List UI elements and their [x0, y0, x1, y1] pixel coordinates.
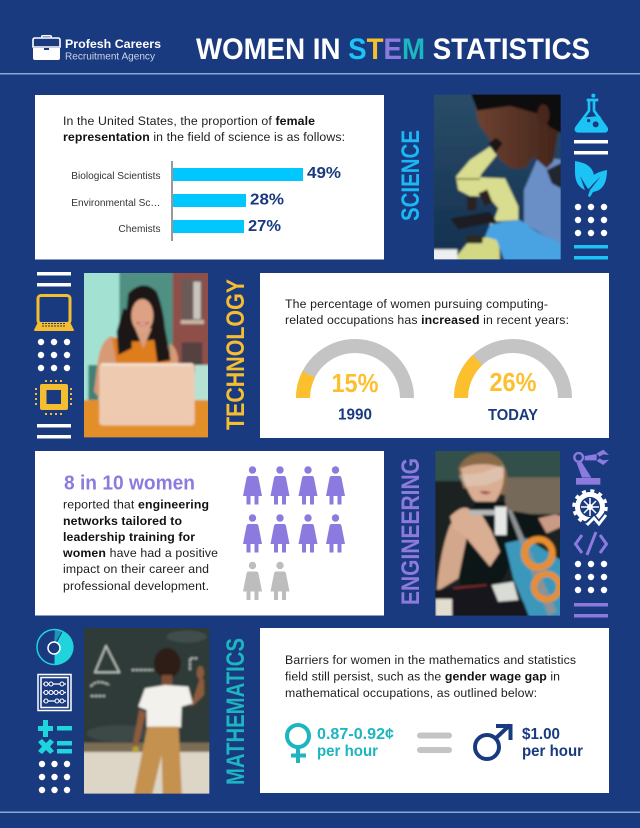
technology intro text line 2: related occupations has increased in recent years: — [285, 313, 569, 327]
science intro text line 2: representation in the field of science is as follows: — [63, 130, 345, 144]
icon: male symbol — [475, 725, 510, 759]
engineering body text: networks tailored to — [63, 514, 182, 528]
bar: chemists: 27% — [248, 218, 281, 235]
white lines — [574, 140, 608, 154]
gauge: 1990: 15% — [332, 368, 378, 398]
icon: briefcase — [33, 35, 60, 60]
female wage value: 0.87-0.92¢ — [317, 726, 394, 743]
male wage — [475, 725, 583, 760]
mathematics intro text: field still persist, such as the gender wage gap in — [285, 670, 560, 684]
icon: leaves — [575, 161, 607, 197]
engineering body text — [62, 498, 218, 593]
engineering body text: leadership training for — [63, 530, 195, 544]
purple lines — [574, 603, 608, 618]
logo: Profesh Careers — [33, 35, 161, 62]
heading: mathematics: MATHEMATICS — [222, 638, 250, 785]
mathematics intro text: mathematical occupations, as outlined below: — [285, 686, 537, 700]
bar: biological scientists: 49% — [307, 165, 341, 182]
panel: technology — [260, 273, 609, 438]
pictogram: 8 of 10 women — [243, 466, 345, 600]
engineering body text: impact on their career and — [63, 562, 209, 576]
mathematics intro text — [285, 653, 576, 700]
header divider — [0, 73, 640, 74]
dots — [38, 339, 70, 371]
bar: environmental scientists: 28% — [250, 192, 284, 208]
icon: robot arm — [574, 450, 609, 485]
icons: science column — [574, 94, 608, 260]
bar chart — [71, 161, 341, 241]
gauge: 1990 — [303, 346, 407, 424]
heading: engineering: ENGINEERING — [397, 458, 425, 605]
bar: environmental scientists — [71, 192, 284, 209]
gauge: today — [461, 346, 565, 424]
icon: flask — [576, 94, 607, 131]
panel: engineering — [35, 451, 384, 616]
icon: code brackets — [576, 532, 606, 555]
technology intro text: The percentage of women pursuing computing- — [285, 297, 548, 311]
icons: engineering column — [574, 450, 609, 618]
science intro text: In the United States, the proportion of female — [63, 114, 315, 128]
heading: science: SCIENCE — [397, 130, 425, 221]
white lines — [37, 424, 71, 438]
icon: female symbol — [287, 725, 309, 763]
gauge: today: 26% — [490, 367, 536, 397]
dots — [575, 561, 607, 593]
icon: chip — [35, 380, 72, 415]
logo tagline: Recruitment Agency — [65, 52, 155, 62]
chart axis — [172, 161, 173, 241]
cyan lines — [574, 245, 608, 260]
photo: scientist at microscope — [431, 91, 564, 263]
panel: science — [35, 95, 384, 260]
gauge: today: TODAY — [488, 407, 538, 424]
stat headline: 8 in 10 women — [64, 472, 195, 494]
heading: technology: TECHNOLOGY — [222, 279, 250, 430]
photo: girl at blackboard — [81, 625, 213, 797]
logo name: Profesh Careers — [65, 38, 161, 51]
female wage unit: per hour — [317, 743, 378, 760]
bar: environmental scientists: Environmental Sc… — [71, 198, 160, 209]
male wage unit: per hour — [522, 743, 583, 760]
icon: pie chart — [37, 630, 74, 665]
footer divider — [0, 812, 640, 813]
engineering body text: women have had a positive — [62, 546, 218, 560]
icons: mathematics column — [37, 630, 74, 793]
white lines — [37, 272, 71, 286]
bar: biological scientists — [71, 165, 341, 182]
icon: laptop — [34, 296, 74, 331]
icon: math operators — [38, 720, 72, 754]
dots — [575, 204, 607, 236]
equals bars — [417, 732, 452, 753]
male wage value: $1.00 — [522, 726, 560, 743]
bar: biological scientists: Biological Scientists — [71, 171, 160, 182]
photo: woman engineer with robot — [432, 448, 563, 619]
panel: mathematics — [260, 628, 609, 793]
bar: chemists — [118, 218, 281, 235]
gauge: 1990: 1990 — [338, 406, 372, 424]
mathematics intro text: Barriers for women in the mathematics and statistics — [285, 653, 576, 667]
icon: abacus — [38, 674, 71, 710]
dots — [39, 761, 70, 793]
engineering body text: professional development. — [63, 579, 209, 593]
icon: gear with graph — [574, 491, 606, 525]
engineering body text: reported that engineering — [63, 498, 209, 512]
icons: technology column — [34, 272, 74, 438]
female wage — [287, 725, 394, 763]
title: WOMEN IN STEM STATISTICS — [196, 33, 590, 66]
photo: woman at laptop — [81, 270, 211, 441]
bar: chemists: Chemists — [118, 224, 160, 235]
